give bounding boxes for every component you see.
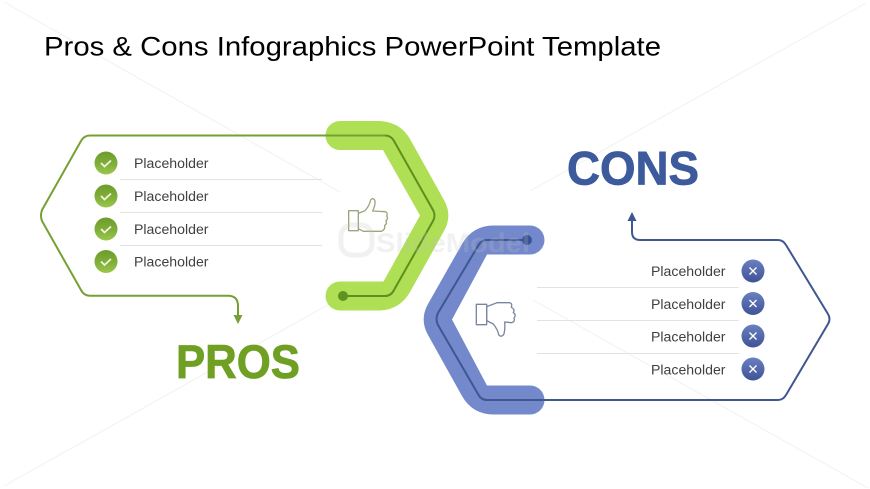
watermark (341, 225, 530, 258)
cons list item 4 (651, 358, 764, 380)
heading: pros: PROS (176, 335, 300, 388)
pros list divider lines (120, 180, 322, 246)
cons list item 2 (651, 292, 764, 315)
cons list item 2: Placeholder (651, 297, 726, 312)
cons list item 3: Placeholder (651, 330, 726, 344)
pros list item 4: Placeholder (134, 254, 209, 270)
thick blue bracket (424, 226, 544, 414)
cons list item 1 (651, 260, 764, 282)
cons list item 3 (651, 324, 764, 348)
icon: thumbs up (349, 199, 388, 231)
thick green bracket (326, 121, 448, 310)
pros list item 3 (94, 218, 209, 240)
panel: cons (424, 212, 830, 414)
pros list item 1: Placeholder (134, 156, 209, 171)
blue outline with arrow (436, 212, 830, 400)
title: Pros & Cons Infographics PowerPoint Template (44, 32, 661, 62)
green outline with arrow (41, 136, 434, 324)
pros list item 1 (94, 152, 209, 174)
heading: cons: CONS (567, 142, 699, 194)
pros list item 3: Placeholder (134, 222, 209, 237)
pros list item 4 (94, 250, 209, 273)
panel: pros (41, 121, 448, 324)
icon: thumbs down (476, 303, 515, 336)
pros list item 2: Placeholder (134, 189, 209, 204)
cons list item 1: Placeholder (651, 264, 726, 279)
cons list item 4: Placeholder (651, 362, 726, 378)
pros list item 2 (94, 184, 209, 208)
watermark: SlideModel (376, 228, 530, 258)
cons list divider lines (537, 288, 739, 354)
